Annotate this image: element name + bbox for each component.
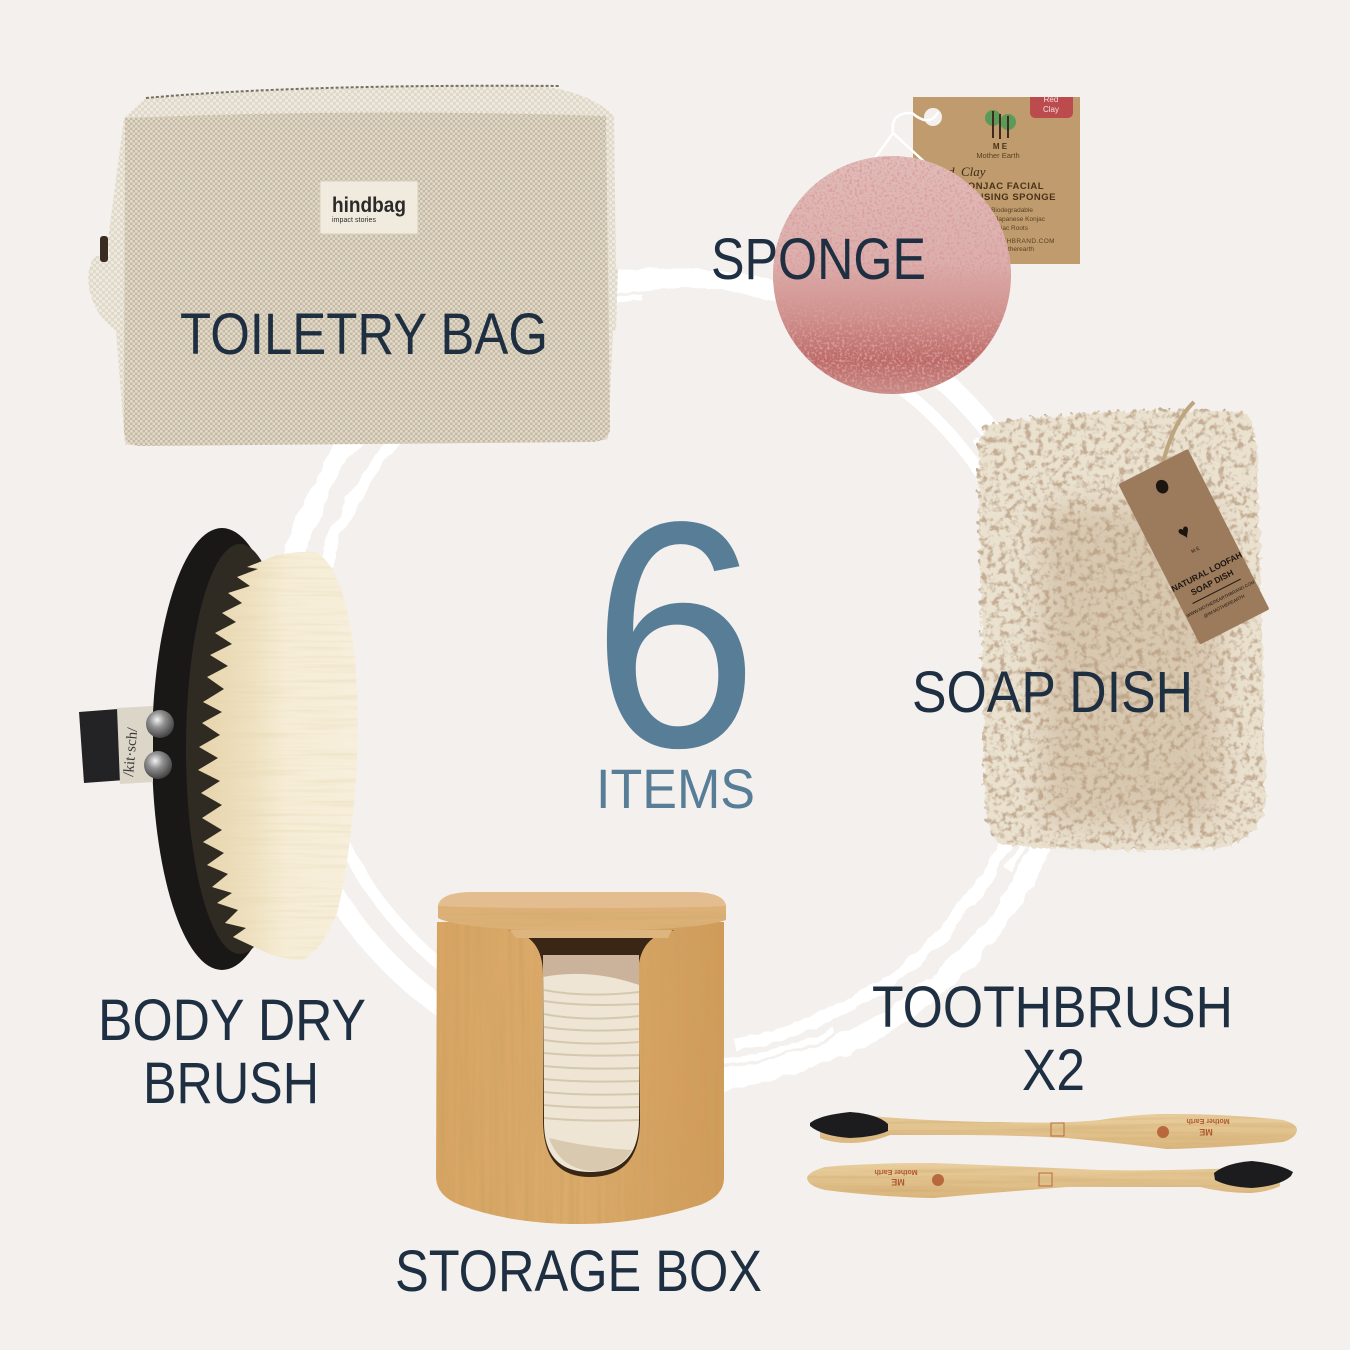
label: storage box: STORAGE BOX: [395, 1239, 762, 1304]
sponge with card: [773, 95, 1080, 394]
tag logo: ♥: [1174, 520, 1195, 545]
center number: 6: [592, 455, 758, 814]
engraved marks: Mother Earth: [874, 1168, 918, 1175]
card text: Japanese Konjac: [995, 216, 1046, 223]
hindbag label: impact stories: [332, 217, 376, 224]
card hole: [924, 108, 942, 126]
bag right handle: [604, 262, 618, 334]
sponge string: [870, 112, 955, 190]
hang tag: SOAP DISH: [1189, 567, 1235, 597]
label: toiletry bag: TOILETRY BAG: [180, 302, 548, 367]
bag front: [124, 112, 610, 446]
cotton pads: [543, 955, 639, 1172]
card text: M E: [993, 142, 1008, 151]
bag side and top panels: [108, 86, 616, 445]
label: sponge: SPONGE: [711, 227, 926, 292]
card text: Konjac Roots: [989, 225, 1029, 232]
brush inner rim: [186, 544, 294, 954]
loofah: [978, 410, 1266, 850]
toothbrush 1: [810, 1112, 1297, 1149]
bristles: [198, 552, 358, 960]
strap: [79, 709, 125, 783]
hindbag label: hindbag: [332, 194, 406, 217]
label: body dry brush: BRUSH: [143, 1051, 319, 1116]
black bristles: [1214, 1161, 1293, 1188]
strap band: /kit·sch/: [121, 726, 141, 777]
body dry brush: [79, 528, 358, 970]
hindbag label: [320, 181, 418, 234]
engraved marks: ME: [1199, 1127, 1213, 1137]
label: toothbrush x2: [872, 975, 1233, 1103]
card text: MOTHEREARTHBRAND.COM: [957, 238, 1055, 245]
opening: [508, 930, 675, 1177]
engraved marks: ME: [891, 1177, 905, 1187]
mesh pad: [549, 1138, 632, 1171]
toiletry bag: [88, 86, 618, 446]
strap band: [117, 706, 153, 784]
bag zipper pull: [100, 236, 108, 262]
card text: CLEANSING SPONGE: [949, 192, 1056, 203]
engraved marks: [1051, 1117, 1230, 1138]
engraved marks: [874, 1168, 1052, 1187]
card text: [948, 142, 1056, 253]
hang tag: M E: [1190, 545, 1202, 555]
hang tag: @IM.MOTHEREARTH: [1203, 593, 1246, 619]
card text: d. Clay: [948, 164, 986, 179]
brush stroke ring: [273, 278, 1077, 1082]
red clay corner: [1030, 95, 1073, 118]
bag handle: [88, 256, 128, 336]
kraft card: [913, 95, 1080, 264]
label: body dry brush: BODY DRY: [98, 988, 366, 1053]
brush back: [152, 528, 292, 970]
engraved marks: Mother Earth: [1186, 1117, 1230, 1124]
snaps: [144, 710, 174, 779]
loofah recess: [1040, 505, 1220, 825]
label: soap dish: SOAP DISH: [912, 660, 1193, 725]
hang tag: NATURAL LOOFAH: [1170, 550, 1244, 594]
center caption: ITEMS: [596, 757, 755, 820]
lid top surface: [438, 892, 726, 908]
storage box: [436, 892, 726, 1224]
card text: Biodegradable: [991, 207, 1033, 214]
sponge ball: [773, 156, 1011, 394]
twine: [1160, 402, 1194, 476]
bag zipper: [146, 86, 560, 98]
label: toothbrush x2: X2: [1022, 1038, 1085, 1103]
hang tag: [1118, 449, 1270, 645]
opening rim: [510, 930, 672, 938]
lid: [438, 892, 726, 931]
toothbrushes: [807, 1112, 1297, 1198]
red clay corner: Clay: [1043, 105, 1059, 114]
hang tag: WWW.MOTHEREARTHBRAND.COM: [1186, 579, 1256, 618]
card text: @motherearth: [992, 246, 1034, 253]
trees logo: [985, 110, 1016, 139]
red clay corner: Red: [1044, 95, 1058, 104]
label: body dry brush: [98, 988, 366, 1116]
black bristles: [810, 1112, 888, 1138]
box body: [436, 922, 724, 1224]
card text: Mother Earth: [976, 151, 1020, 160]
label: toothbrush x2: TOOTHBRUSH: [872, 975, 1233, 1040]
toothbrush 2: [807, 1161, 1293, 1198]
card text: KONJAC FACIAL: [960, 181, 1044, 192]
soap dish: [978, 402, 1270, 850]
